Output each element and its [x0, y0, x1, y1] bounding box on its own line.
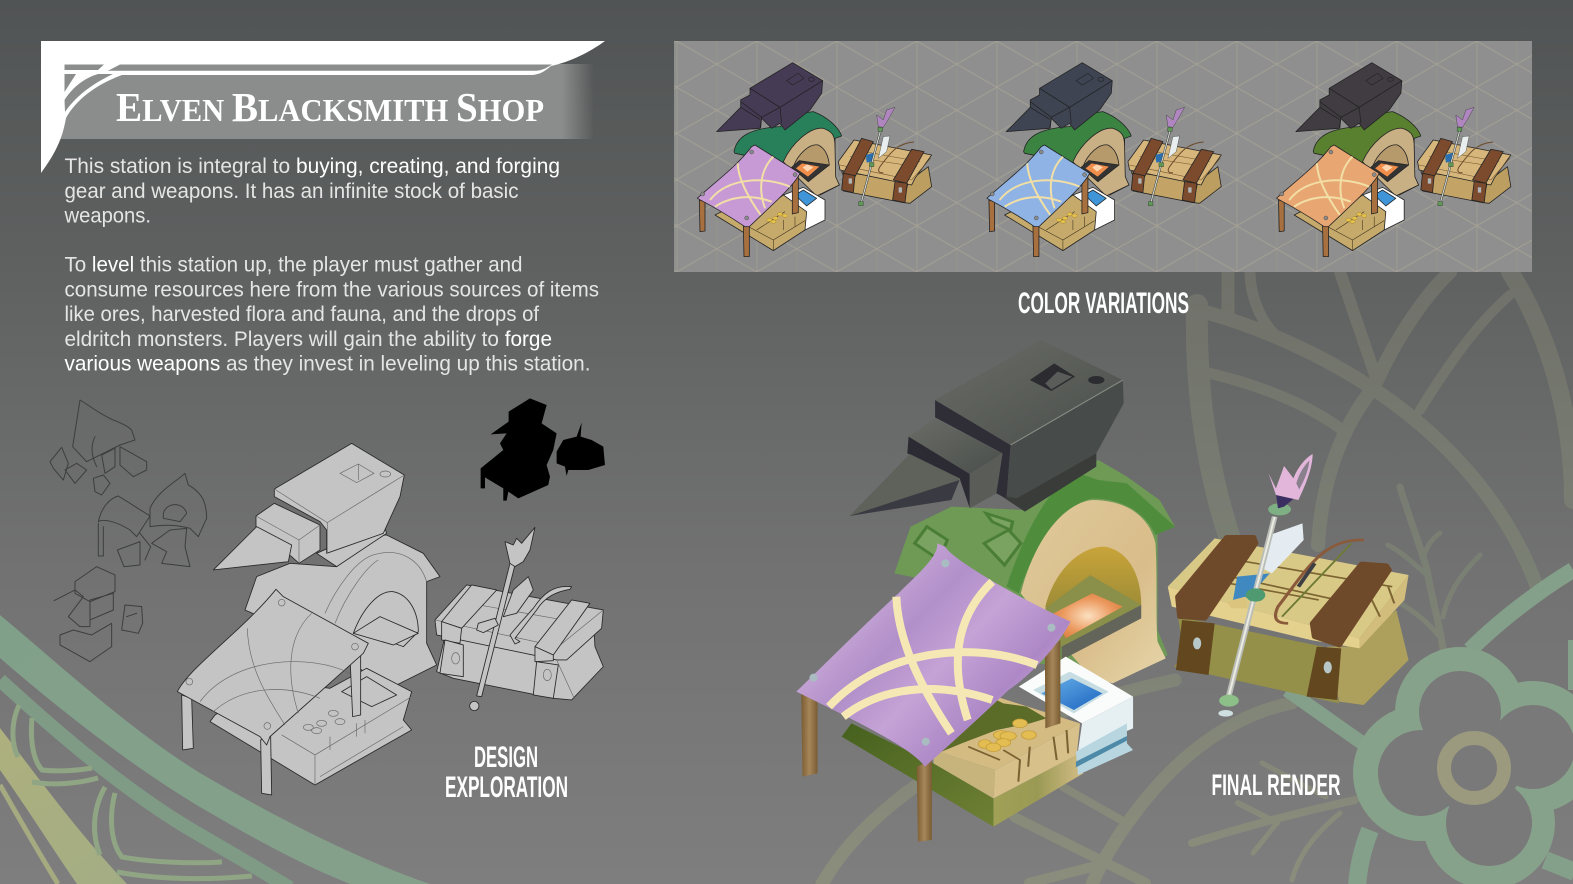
label: design exploration: EXPLORATION [445, 771, 568, 804]
intro text block: eldritch monsters. Players will gain the ability to forge [64, 328, 552, 351]
silhouette [481, 398, 605, 501]
banner frame ornament [41, 41, 605, 173]
sketch: table box [210, 668, 412, 785]
intro text block: various weapons as they invest in leveling up this station. [64, 352, 590, 376]
intro text block [64, 155, 599, 376]
label: design exploration [445, 741, 568, 804]
intro text block: This station is integral to buying, creating, and forging [64, 155, 560, 178]
intro text block: To level this station up, the player must gather and [64, 254, 522, 276]
label: final render: FINAL RENDER [1212, 769, 1341, 802]
market table [842, 697, 1083, 827]
ice basin [1019, 657, 1133, 775]
variation: orange [1277, 63, 1511, 257]
background ornament: lower-left curved bands [0, 615, 430, 884]
design exploration line drawing [177, 443, 603, 795]
title text: ELVEN BLACKSMITH SHOP [116, 84, 544, 130]
canopy [796, 543, 1071, 767]
background ornament: green flower [1287, 570, 1573, 884]
label: color variations: COLOR VARIATIONS [1018, 287, 1189, 320]
sketch: chest [435, 585, 603, 700]
anvil [849, 340, 1124, 516]
variation: purple [697, 63, 932, 257]
posts [801, 640, 1060, 842]
sketch: anvil [213, 443, 404, 570]
title banner [41, 41, 605, 173]
sketch: spear, sword and bow [470, 527, 572, 711]
coins [978, 719, 1036, 752]
panel: color variations [674, 41, 1532, 272]
sketch: forge [245, 535, 440, 690]
intro text block: weapons. [64, 204, 151, 228]
label: design exploration: DESIGN [474, 741, 538, 774]
final render illustration [796, 340, 1409, 842]
background ornament: large leaf and twigs, right [822, 272, 1573, 884]
treasure chest [1168, 537, 1409, 705]
sword, bow and spear [1218, 454, 1364, 717]
intro text block: gear and weapons. It has an infinite stock of basic [64, 180, 518, 203]
intro text block: consume resources here from the various sources of items [64, 278, 599, 302]
intro text block: like ores, harvested flora and fauna, and the drops of [64, 303, 539, 326]
variation: blue [987, 63, 1221, 257]
forge [894, 460, 1175, 683]
sketch: canopy and posts [177, 589, 368, 795]
design exploration thumbnails [50, 400, 207, 662]
